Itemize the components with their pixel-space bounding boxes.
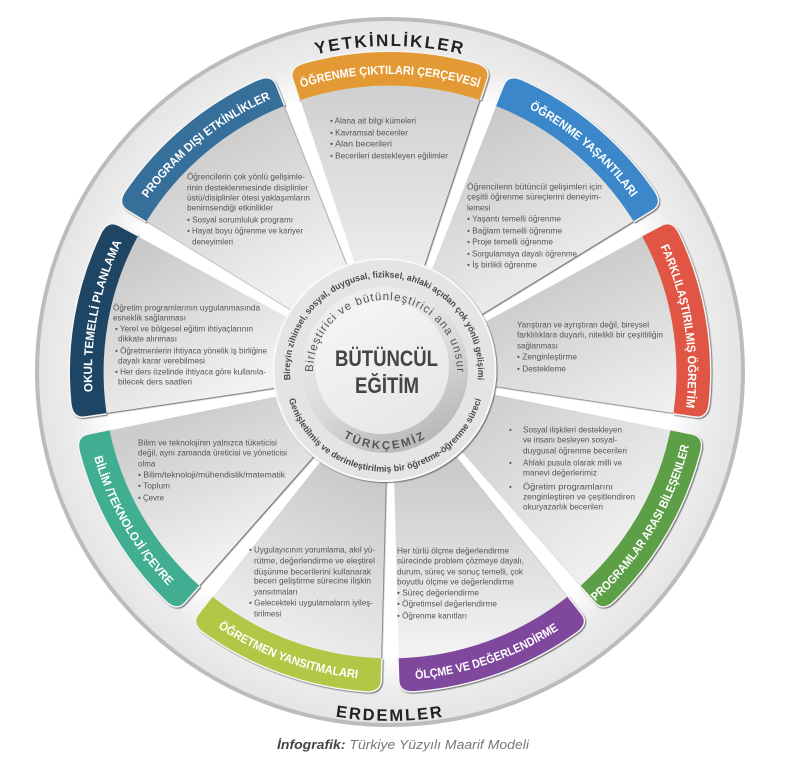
panel: Programlar Arası Bileşenler: • [509, 482, 512, 492]
panel: Öğrenme Yaşantıları: • Proje temelli öğrenme [467, 238, 554, 246]
panel: Programlar Arası Bileşenler: zenginleştiren ve çeşitlendiren [523, 492, 635, 502]
heading: ERDEMLER: ERDEMLER [336, 706, 442, 721]
panel: Öğrenme Çıktıları Çerçevesi [292, 50, 490, 266]
panel: Farklılaştırılmış Öğretim: Yarıştıran ve ayrıştıran değil, bireysel [517, 320, 649, 330]
panel: Farklılaştırılmış Öğretim: sağlanması [517, 342, 558, 350]
panel: Programlar Arası Bileşenler: Öğretim programlarını [523, 482, 613, 492]
panel: Program Dışı Etkinlikler: • Hayat boyu öğrenme ve kariyer [187, 226, 303, 236]
panel: Program Dışı Etkinlikler: deneyimleri [192, 238, 233, 246]
central hub [273, 258, 498, 484]
panel: Okul Temelli Planlama: • Yerel ve bölgesel eğitim ihtiyaçlarının [115, 324, 253, 334]
panel: Bilim / Teknoloji / Çevre: değil, aynı zamanda üreticisi ve yöneticisi [138, 448, 287, 458]
panel: Okul Temelli Planlama: dikkate alınması [118, 334, 177, 344]
panel: Okul Temelli Planlama: OKUL TEMELLİ PLANLAMA [84, 242, 122, 392]
panel: Ölçme ve Değerlendirme: Her türlü ölçme değerlendirme [397, 546, 510, 556]
panel: Program Dışı Etkinlikler: PROGRAM DIŞI ETKİNLİKLER [142, 92, 270, 198]
panel: Okul Temelli Planlama: esneklik sağlanması [113, 314, 186, 322]
hub text: TÜRKÇEMİZ: TÜRKÇEMİZ [346, 430, 424, 452]
panel: Öğrenme Yaşantıları [432, 77, 661, 316]
panel: Öğrenme Yaşantıları: Öğrencilerin bütüncül gelişimleri için [467, 182, 602, 192]
panel: Öğrenme Yaşantıları: • Yaşantı temelli öğrenme [467, 214, 562, 224]
panel: Ölçme ve Değerlendirme: boyutlu ölçme ve değerlendirme [397, 578, 515, 586]
panel: Programlar Arası Bileşenler: ve insanı besleyen sosyal- [523, 436, 617, 444]
panel: Öğretmen Yansıtmaları: beceri geliştirme sürecine ilişkin [254, 576, 371, 586]
panel: Farklılaştırılmış Öğretim: FARKLILAŞTIRILMIŞ ÖĞRETİM [660, 244, 699, 408]
panel: Programlar Arası Bileşenler [462, 394, 704, 610]
panel: Öğretmen Yansıtmaları: tirilmesi [254, 610, 281, 618]
panel: Bilim / Teknoloji / Çevre: olma [138, 460, 156, 468]
hub title: EĞİTİM [355, 373, 419, 398]
panel: Ölçme ve Değerlendirme: sürecinde problem çözmeye dayalı, [397, 556, 524, 566]
panel: Farklılaştırılmış Öğretim: farklılıklara duyarlı, nitelikli bir çeşitliliğin [517, 330, 663, 340]
panel: Ölçme ve Değerlendirme [394, 457, 587, 694]
hub title [335, 346, 438, 398]
panel: Farklılaştırılmış Öğretim [486, 224, 714, 420]
panel: Öğrenme Yaşantıları: lemesi [467, 204, 490, 212]
hub inner disc [315, 300, 449, 434]
panel: Bilim / Teknoloji / Çevre: • Çevre [138, 494, 165, 502]
heading: YETKİNLİKLER: YETKİNLİKLER [314, 32, 463, 54]
panel: Okul Temelli Planlama [68, 224, 286, 420]
panel: Öğrenme Yaşantıları: ÖĞRENME YAŞANTILARI [530, 100, 638, 197]
panel: Öğrenme Yaşantıları: çeşitli öğrenme süreçlerini deneyim- [467, 192, 601, 202]
panel: Öğretmen Yansıtmaları [196, 462, 388, 694]
panel: Farklılaştırılmış Öğretim: • Zenginleştirme [517, 352, 578, 362]
panel: Okul Temelli Planlama: Öğretim programlarının uygulanmasında [113, 304, 261, 312]
panel: Farklılaştırılmış Öğretim: • Destekleme [517, 364, 567, 374]
panel: Program Dışı Etkinlikler: Öğrencilerin çok yönlü gelişimle- [187, 172, 305, 182]
panel: Programlar Arası Bileşenler: PROGRAMLAR ARASI BİLEŞENLER [590, 444, 689, 601]
panel: Ölçme ve Değerlendirme: • Süreç değerlendirme [397, 588, 480, 598]
panel: Öğretmen Yansıtmaları: • Gelecekteki uygulamaların iyileş- [249, 598, 373, 608]
panel: Bilim / Teknoloji / Çevre [78, 396, 315, 610]
panel: Bilim / Teknoloji / Çevre: BİLİM /TEKNOLOJİ /ÇEVRE [94, 456, 174, 586]
panel: Öğretmen Yansıtmaları: rütme, değerlendirme ve eleştirel [254, 556, 375, 566]
panel: Öğrenme Çıktıları Çerçevesi: • Kavramsal beceriler [330, 128, 408, 138]
panel: Programlar Arası Bileşenler: okuryazarlık becerileri [523, 502, 603, 512]
panel: Öğretmen Yansıtmaları: yansıtmaları [254, 588, 298, 596]
panel: Programlar Arası Bileşenler: • [509, 426, 512, 434]
panel: Ölçme ve Değerlendirme: • Öğretimsel değerlendirme [397, 600, 498, 608]
panel: Program Dışı Etkinlikler [121, 77, 348, 310]
panel: Öğrenme Çıktıları Çerçevesi: • Alana ait bilgi kümeleri [330, 116, 416, 126]
panel: Programlar Arası Bileşenler: • [509, 458, 512, 468]
hub title: BÜTÜNCÜL [335, 346, 438, 371]
panel: Bilim / Teknoloji / Çevre: • Bilim/teknoloji/mühendislik/matematik [138, 470, 286, 480]
panel: Programlar Arası Bileşenler: duygusal öğrenme becerileri [523, 446, 627, 456]
hub ring [302, 287, 468, 453]
panel: Programlar Arası Bileşenler: Sosyal ilişkileri destekleyen [523, 426, 622, 434]
panel: Program Dışı Etkinlikler: • Sosyal sorumluluk programı [187, 216, 293, 224]
hub text: lower outer arc: Genişletilmiş ve derinleştirilmiş bir öğretme-öğrenme süreci [290, 398, 481, 474]
panel: Öğretmen Yansıtmaları: ÖĞRETMEN YANSITMALARI [220, 620, 358, 678]
hub text: upper outer arc: Bireyin zihinsel, sosyal, duygusal, fiziksel, ahlaki açıdan çok yönlü gelişimi [283, 270, 484, 380]
caption: İnfografik: Türkiye Yüzyılı Maarif Modeli [277, 737, 530, 752]
panel: Program Dışı Etkinlikler: üstü/disiplinler ötesi yaklaşımların [187, 194, 310, 202]
panel: Ölçme ve Değerlendirme: ÖLÇME VE DEĞERLENDİRME [416, 623, 558, 680]
panel: Program Dışı Etkinlikler: benimsendiği etkinlikler [187, 204, 273, 212]
panel: Öğrenme Çıktıları Çerçevesi: ÖĞRENME ÇIKTILARI ÇERÇEVESİ [300, 66, 481, 88]
hub text: ring upper: Birleştirici ve bütünleştirici ana unsur [305, 292, 464, 372]
panel: Öğrenme Çıktıları Çerçevesi: • Becerileri destekleyen eğilimler [330, 152, 448, 160]
panel: Ölçme ve Değerlendirme: • Öğrenme kanıtları [397, 612, 467, 620]
panel: Öğrenme Çıktıları Çerçevesi: • Alan becerileri [330, 140, 392, 148]
panel: Ölçme ve Değerlendirme: durum, süreç ve sonuç temelli, çok [397, 568, 524, 576]
panel: Okul Temelli Planlama: dayalı karar verebilmesi [118, 356, 205, 366]
panel: Öğrenme Yaşantıları: • İş birlikli öğrenme [467, 260, 538, 270]
panel: Programlar Arası Bileşenler: Ahlaki pusula olarak milli ve [523, 458, 623, 468]
panel: Öğrenme Yaşantıları: • Bağlam temelli öğrenme [467, 226, 563, 236]
panel: Program Dışı Etkinlikler: rinin desteklenmesinde disiplinler [187, 184, 308, 192]
panel: Okul Temelli Planlama: • Her ders özelinde ihtiyaca göre kullanıla- [115, 368, 266, 376]
panel: Bilim / Teknoloji / Çevre: • Toplum [138, 482, 170, 490]
panel: Okul Temelli Planlama: bilecek ders saatleri [118, 378, 192, 386]
panel: Okul Temelli Planlama: • Öğretmenlerin ihtiyaca yönelik iş birliğine [115, 346, 268, 356]
panel: Öğrenme Yaşantıları: • Sorgulamaya dayalı öğrenme [467, 250, 578, 258]
panel: Öğretmen Yansıtmaları: • Uygulayıcının yorumlama, akıl yü- [249, 546, 375, 554]
panel: Öğretmen Yansıtmaları: düşünme becerilerini kullanarak [254, 568, 372, 576]
panel: Programlar Arası Bileşenler: manevi değerlerimiz [523, 468, 597, 478]
panel: Bilim / Teknoloji / Çevre: Bilim ve teknolojinin yalnızca tüketicisi [138, 438, 277, 448]
